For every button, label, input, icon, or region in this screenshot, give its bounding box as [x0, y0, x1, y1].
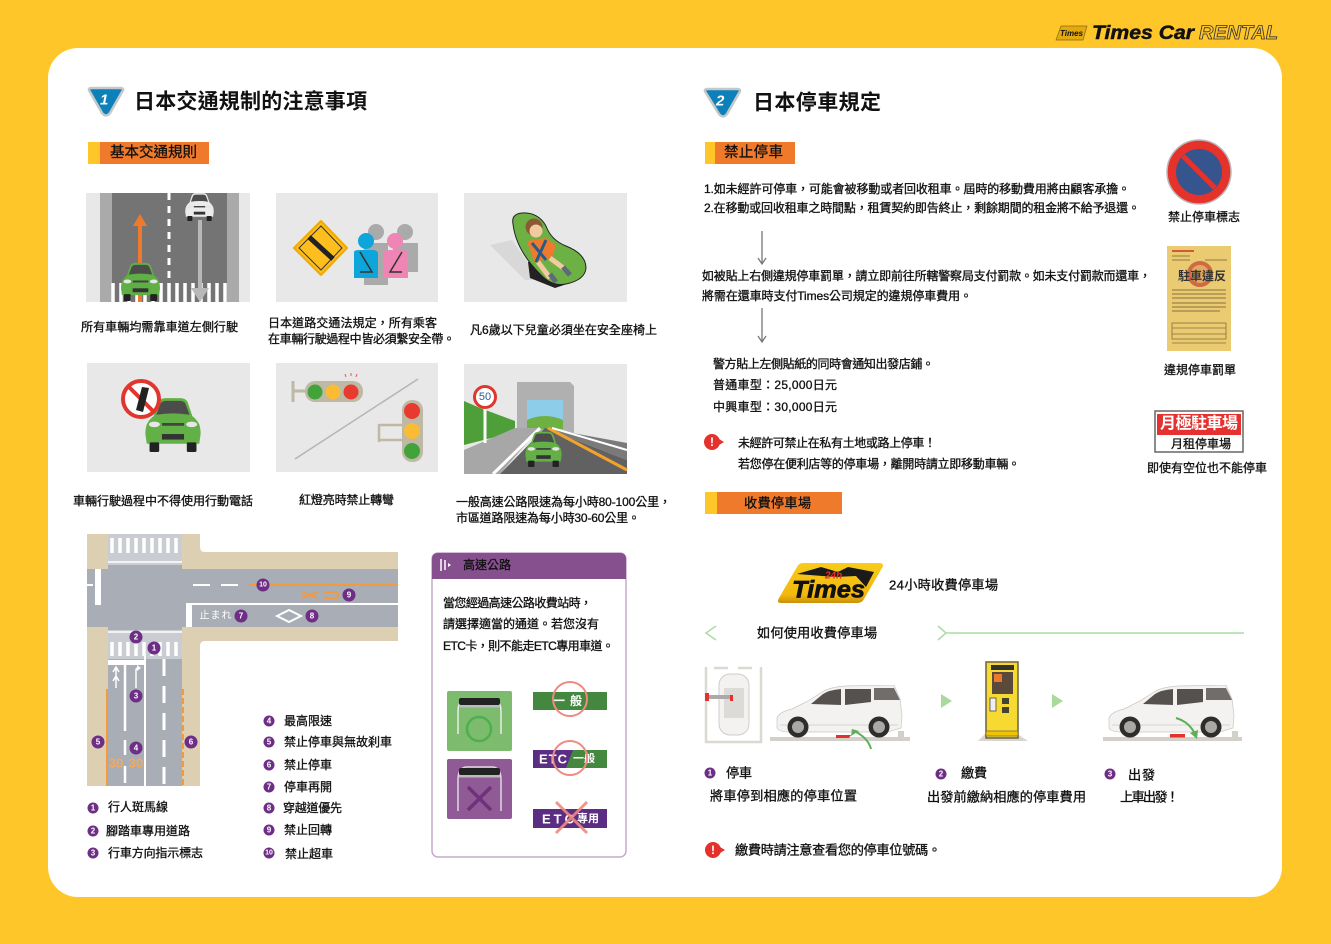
legend: road markings right: [264, 713, 392, 861]
illustration: departing van: [1103, 685, 1242, 739]
legend: road markings left: 3: [91, 848, 96, 858]
section 1 heading: 1: [100, 92, 108, 108]
panel: seat belt: [276, 193, 438, 302]
step 3: 出發: [1128, 768, 1155, 782]
step 2: 2: [939, 770, 944, 778]
caption: seat belts: 日本道路交通法規定，所有乘客: [268, 315, 437, 330]
section 2 heading: 2: [715, 92, 725, 110]
step 1: 1: [708, 768, 713, 778]
step 2: 出發前繳納相應的停車費用: [927, 788, 1086, 804]
step 3: 3: [1108, 770, 1113, 778]
road diagram: 30: [129, 756, 143, 770]
text: private land warning: [738, 435, 1020, 471]
icon: warning 2: !: [711, 843, 715, 857]
legend: road markings left: 2: [91, 826, 96, 836]
legend: road markings right: 最高限速: [284, 713, 332, 728]
legend: road markings right: 8: [267, 804, 272, 812]
legend: road markings right: 5: [267, 738, 272, 746]
icon: general lane tile: [447, 691, 512, 751]
legend: road markings right: 停車再開: [284, 779, 332, 794]
step 3: 上車出發！: [1120, 790, 1179, 804]
panel: speed limit: [464, 364, 627, 474]
caption: seat belts: 在車輛行駛過程中皆必須繫安全帶。: [268, 331, 455, 346]
legend: road markings right: 禁止回轉: [284, 823, 332, 837]
text: 24h parking: 24小時收費停車場: [889, 576, 998, 592]
heading: how to use: [706, 624, 1244, 640]
panel: expressway: [432, 553, 626, 857]
road diagram: 止まれ: [200, 610, 232, 622]
tag: no parking: 禁止停車: [724, 144, 783, 161]
tag: paid parking: [705, 492, 842, 514]
text: fines: 警方貼上左側貼紙的同時會通知出發店鋪。: [713, 356, 934, 371]
legend: road markings right: 禁止超車: [285, 846, 333, 861]
brand logo: [1056, 23, 1278, 44]
panel: no phone: [87, 363, 250, 472]
panel: expressway: ETC卡，則不能走ETC專用車道。: [443, 639, 614, 653]
sign: general: [533, 682, 607, 716]
road diagram: 4: [134, 744, 139, 752]
step 1: [704, 764, 857, 804]
text: parking ticket: [702, 268, 1151, 303]
sign: no parking: 禁止停車標志: [1168, 209, 1240, 224]
diagram: parking slot: [705, 667, 761, 742]
text: private land warning: 若您停在便利店等的停車場，離開時請立即移動車輛。: [738, 456, 1020, 471]
sign: monthly parking: 即使有空位也不能停車: [1147, 460, 1267, 475]
road diagram: 6: [189, 738, 194, 746]
legend: road markings right: 4: [267, 716, 272, 726]
illustration: parked van: [770, 685, 910, 749]
step 2: [927, 766, 1086, 804]
road diagram: 5: [96, 738, 101, 746]
sign: ETC only: ETC: [542, 812, 577, 826]
legend: road markings right: 穿越道優先: [283, 800, 342, 815]
legend: road markings left: [88, 799, 203, 860]
road diagram: 7: [239, 612, 244, 620]
section 1 heading: 日本交通規制的注意事項: [134, 90, 367, 114]
brand logo: Times: [1060, 29, 1084, 38]
legend: road markings right: 9: [267, 826, 272, 834]
step 3: [1104, 768, 1179, 804]
parking ticket: [1164, 246, 1236, 377]
text: fines: [713, 356, 934, 414]
sign: no parking: [1167, 140, 1240, 224]
road diagram: 8: [310, 612, 315, 620]
caption: no phone: 車輛行駛過程中不得使用行動電話: [73, 493, 253, 508]
step 1: 將車停到相應的停車位置: [710, 788, 857, 804]
road diagram: [87, 534, 398, 786]
panel: child seat: [464, 193, 627, 302]
text: private land warning: 未經許可禁止在私有土地或路上停車！: [738, 435, 936, 450]
text: towing rules: 1.如未經許可停車，可能會被移動或者回收租車。屆時的移動費用將由顧客承擔。: [704, 181, 1130, 196]
parking ticket: 駐車違反: [1178, 268, 1226, 283]
text: fines: 普通車型：25,000日元: [713, 377, 837, 392]
parking ticket: 違規停車罰單: [1164, 362, 1236, 377]
sign: ETC general: ETC: [539, 752, 568, 766]
logo: Times 24h: Times: [792, 576, 865, 604]
legend: road markings right: 禁止停車: [284, 757, 332, 772]
sign: ETC only: [533, 802, 607, 833]
icon: warning 1: !: [710, 435, 714, 449]
tag: basic rules: [88, 142, 209, 164]
caption: speed limit: 市區道路限速為每小時30-60公里。: [456, 510, 640, 525]
sign: ETC general: [533, 741, 607, 775]
road diagram: 10: [259, 582, 267, 588]
icon: ETC-only lane tile: [447, 759, 512, 819]
caption: child seat: 凡6歲以下兒童必須坐在安全座椅上: [470, 322, 657, 337]
legend: road markings left: 行車方向指示標志: [108, 845, 203, 860]
road diagram: 3: [134, 692, 139, 700]
step 1: 停車: [726, 764, 752, 780]
text: fines: 中興車型：30,000日元: [713, 399, 837, 414]
brand logo: RENTAL: [1199, 23, 1278, 44]
section 2 heading: [705, 89, 881, 116]
legend: road markings right: 10: [265, 850, 273, 856]
step 2: 繳費: [961, 766, 987, 780]
sign: general: 一般: [553, 693, 587, 708]
tag: no parking: [705, 142, 795, 164]
arrow: step 1 to 2: [941, 694, 952, 708]
text: towing rules: [704, 181, 1140, 215]
panel: keep left: [86, 193, 250, 302]
text: parking ticket: 將需在還車時支付Times公司規定的違規停車費用。: [702, 288, 972, 303]
illustration: pay machine: [978, 662, 1028, 741]
arrow: down 1: [758, 231, 766, 264]
sign: monthly parking: 月租停車場: [1171, 436, 1231, 451]
road diagram: 30: [109, 756, 123, 770]
logo: Times 24h: 24h: [824, 570, 842, 582]
logo: Times 24h: [778, 563, 883, 604]
panel: expressway: 當您經過高速公路收費站時，: [443, 595, 592, 610]
arrow: step 2 to 3: [1052, 694, 1063, 708]
panel: expressway: 請選擇適當的通道。若您沒有: [443, 616, 599, 631]
text: towing rules: 2.在移動或回收租車之時間點，租賃契約即告終止，剩餘期間的租金將不給予退還。: [704, 200, 1140, 215]
tag: basic rules: 基本交通規則: [110, 143, 197, 161]
icon: warning 1: [704, 434, 724, 450]
road diagram: 1: [152, 644, 157, 652]
caption: keep left: 所有車輛均需靠車道左側行駛: [81, 319, 238, 334]
sign: monthly parking: [1147, 411, 1267, 475]
section 2 heading: 日本停車規定: [753, 90, 881, 114]
caption: seat belts: [268, 315, 455, 346]
legend: road markings right: 6: [267, 760, 272, 770]
legend: road markings right: 禁止停車與無故刹車: [284, 734, 392, 749]
panel: speed limit: 50: [479, 391, 491, 403]
sign: ETC only: 專用: [577, 811, 599, 825]
road diagram: 9: [347, 590, 352, 600]
caption: red light: 紅燈亮時禁止轉彎: [299, 492, 394, 507]
legend: road markings left: 1: [91, 804, 96, 812]
panel: red light: [276, 363, 438, 472]
legend: road markings left: 腳踏車專用道路: [106, 823, 190, 838]
sign: monthly parking: 月極駐車場: [1160, 414, 1238, 432]
sign: ETC general: 一般: [573, 751, 595, 765]
arrow: down 2: [758, 308, 766, 342]
caption: speed limit: 一般高速公路限速為每小時80-100公里，: [456, 494, 671, 509]
caption: speed limit: [456, 494, 671, 525]
legend: road markings left: 行人斑馬線: [108, 799, 168, 814]
heading: how to use: 如何使用收費停車場: [757, 624, 877, 640]
icon: warning 2: [705, 842, 725, 858]
tag: paid parking: 收費停車場: [744, 494, 811, 510]
legend: road markings right: 7: [267, 782, 272, 792]
road diagram: 2: [134, 632, 139, 642]
panel: expressway: 高速公路: [463, 557, 511, 572]
text: note on parking number: 繳費時請注意查看您的停車位號碼。: [735, 842, 941, 858]
brand logo: Times Car: [1092, 23, 1196, 44]
text: parking ticket: 如被貼上右側違規停車罰單，請立即前往所轄警察局支付罰款。如未支付罰款而還車，: [702, 268, 1151, 283]
